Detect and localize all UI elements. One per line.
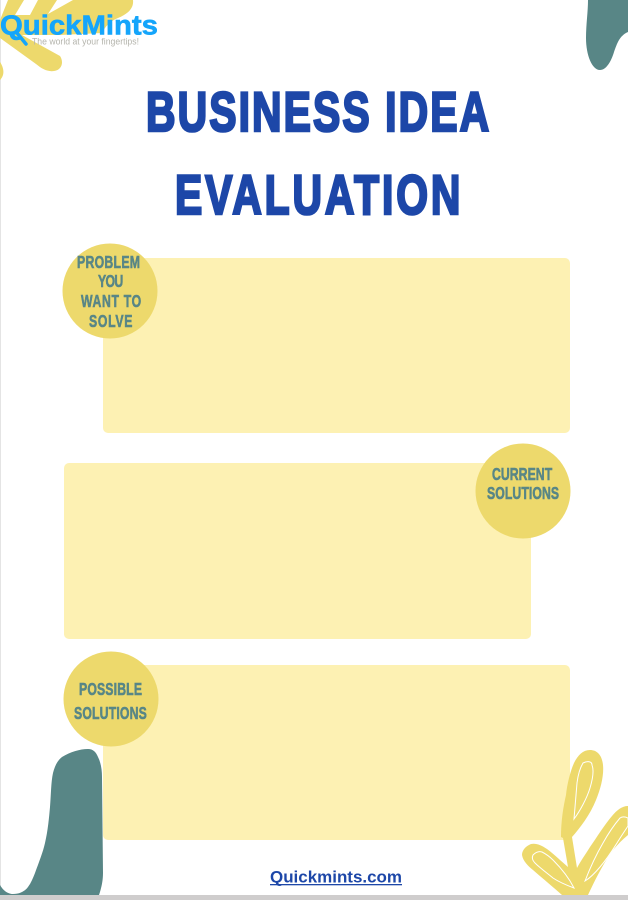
badge: possible solutions: SOLUTIONS [74,704,147,724]
badge: problem you want to solve: YOU [98,272,123,292]
logo magnifier handle [17,33,26,44]
decoration: bottom-right yellow plant [522,750,628,895]
decoration: bottom-left teal blob [0,749,103,895]
decoration: top-right teal blob [586,0,628,70]
title line 2: EVALUATION [175,165,460,227]
panel: problem box [103,258,570,433]
logo tagline: The world at your fingertips! [32,36,139,48]
logo wordmark: QuickMints [0,10,158,40]
badge: possible solutions: POSSIBLE [79,680,142,700]
badge: current solutions: SOLUTIONS [487,484,559,504]
footer link: Quickmints.com [270,868,402,886]
panel: current solutions box [64,463,531,639]
title [146,82,489,227]
logo: QuickMints [0,10,158,48]
badge: current solutions: CURRENT [492,465,553,485]
badge: current solutions [476,444,570,538]
badge: problem you want to solve: SOLVE [89,312,132,332]
title line 1: BUSINESS IDEA [146,82,489,144]
panel: possible solutions box [103,665,570,840]
badge: problem you want to solve [62,244,158,338]
decoration: top-left yellow leaves [0,0,133,80]
badge: problem you want to solve: WANT TO [81,292,141,312]
badge: problem you want to solve: PROBLEM [77,253,140,273]
badge: possible solutions [64,652,158,746]
